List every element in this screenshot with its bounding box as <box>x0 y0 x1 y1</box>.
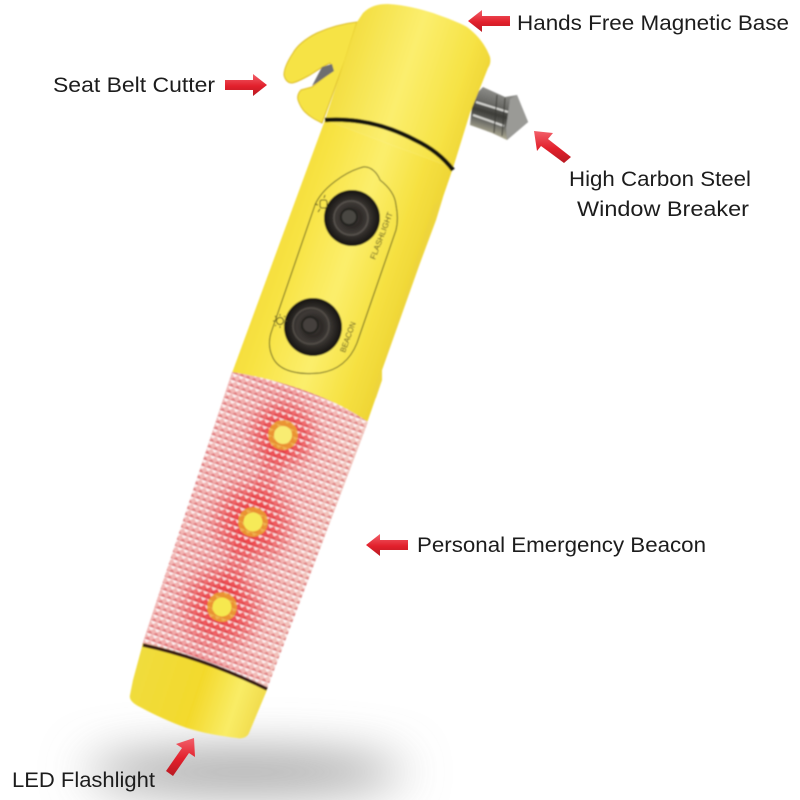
black band <box>325 120 453 170</box>
window breaker steel tip <box>470 87 528 140</box>
flashlight label: FLASHLIGHT <box>368 211 395 261</box>
middle LED <box>238 507 268 537</box>
top LED <box>268 420 298 450</box>
label: LED Flashlight: LED Flashlight <box>12 769 155 792</box>
arrow: LED flashlight <box>166 738 195 776</box>
main yellow body <box>232 120 453 423</box>
icon: beacon <box>273 314 287 328</box>
arrow: seat belt cutter <box>225 74 267 96</box>
central red streak <box>222 435 283 607</box>
bottom yellow cap <box>130 643 267 738</box>
control panel outline <box>270 167 398 374</box>
label: High Carbon Steel Window Breaker: Window Breaker <box>577 198 749 221</box>
label: High Carbon Steel Window Breaker <box>569 168 751 221</box>
lens texture <box>144 372 368 686</box>
arrow: window breaker <box>534 131 571 163</box>
icon: flashlight <box>315 195 327 212</box>
label: Hands Free Magnetic Base: Hands Free Magnetic Base <box>517 12 789 35</box>
lower LED <box>207 592 237 622</box>
label: Personal Emergency Beacon: Personal Emergency Beacon <box>417 534 706 557</box>
label: High Carbon Steel Window Breaker: High Carbon Steel <box>569 168 751 191</box>
middle beacon glow <box>208 478 298 566</box>
lower beacon glow <box>176 563 268 652</box>
beacon label: BEACON <box>338 320 358 354</box>
flashlight button <box>324 190 380 246</box>
top beacon glow <box>246 398 321 472</box>
beacon button <box>284 298 342 356</box>
arrow: magnetic base <box>468 10 510 32</box>
ground shadow <box>85 754 405 790</box>
flashlight device <box>120 4 528 738</box>
red beacon lens <box>142 371 368 688</box>
arrow: emergency beacon <box>366 534 408 556</box>
upper cap <box>325 4 490 168</box>
dark lower band <box>143 645 267 689</box>
label: Seat Belt Cutter: Seat Belt Cutter <box>53 74 215 97</box>
seat belt cutter <box>284 22 357 123</box>
